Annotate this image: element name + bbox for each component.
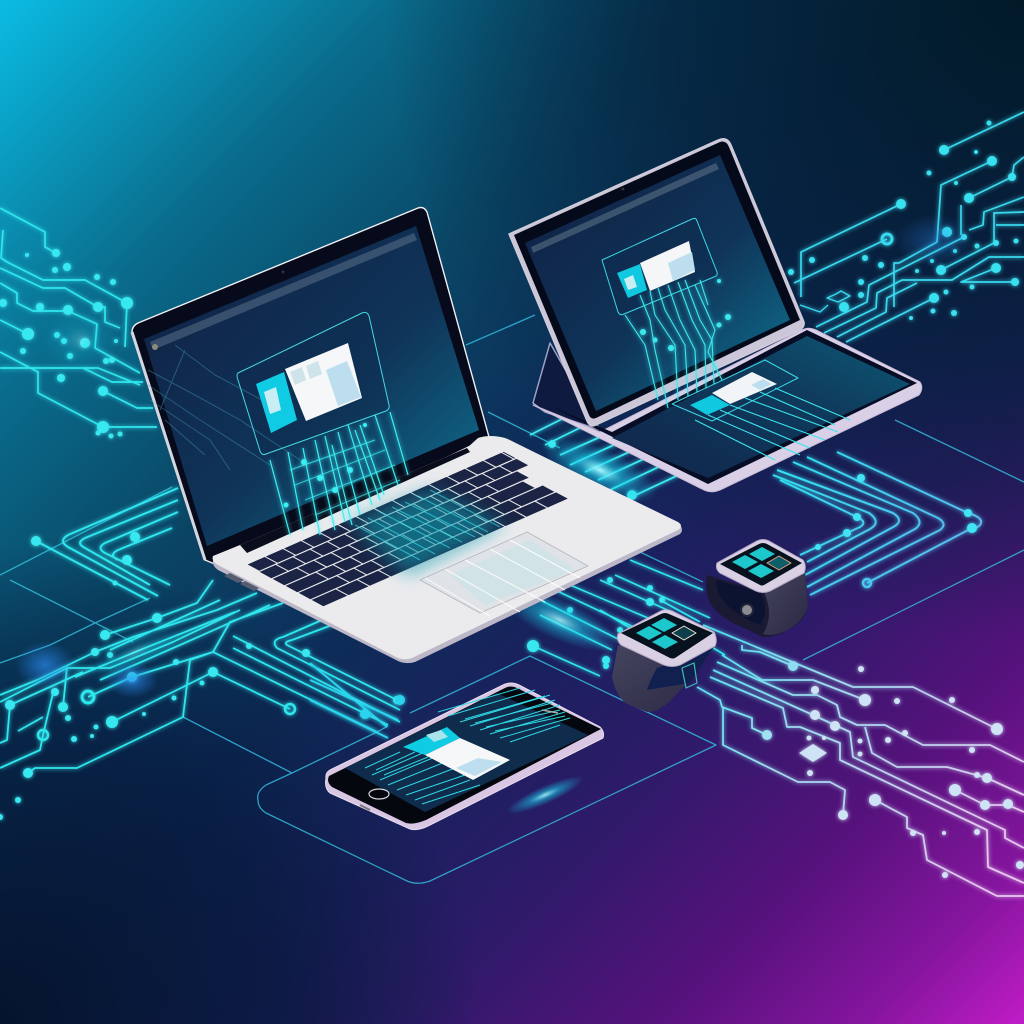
circuit: lines left of phone — [310, 663, 404, 738]
hinge strip — [240, 448, 470, 553]
keyboard traces — [355, 490, 500, 560]
watch case — [716, 540, 805, 592]
glow under phone — [503, 770, 587, 820]
phone home button — [369, 789, 389, 799]
circuit: bright bundle between laptop and tablet — [530, 405, 700, 500]
laptop screen faint traces — [148, 345, 300, 470]
circuit: mid left chevrons — [31, 488, 178, 600]
phone cards — [403, 727, 460, 755]
tablet window — [602, 218, 717, 315]
lower panel window — [672, 360, 798, 421]
phone traces — [365, 688, 570, 804]
tablet kickstand — [533, 343, 600, 430]
circuit: lower right — [697, 625, 1024, 896]
tablet circuit traces — [625, 279, 731, 408]
tablet device — [509, 139, 922, 492]
laptop touchpad — [420, 532, 588, 616]
watch display tiles — [636, 618, 696, 649]
watch case — [617, 610, 716, 666]
circuit: lower left — [0, 580, 401, 820]
upper left glow — [42, 308, 118, 372]
laptop keyboard — [252, 454, 576, 603]
laptop lid — [132, 208, 489, 567]
phone body — [326, 683, 604, 830]
circuit: under laptop and around watches — [527, 560, 725, 676]
tablet screen — [509, 139, 804, 426]
laptop device — [132, 208, 808, 830]
thin layout frame lines — [0, 315, 1024, 883]
laptop keyboard glow overlay — [352, 490, 505, 575]
watch display tiles — [732, 547, 791, 578]
tablet lower panel — [533, 328, 922, 492]
watch band — [706, 573, 808, 637]
lower left glows — [15, 614, 192, 698]
circuit: upper right — [788, 112, 1024, 342]
laptop window — [237, 312, 389, 455]
central glow between laptop and tablet — [534, 425, 666, 515]
circuit: right chevrons — [773, 452, 981, 595]
laptop base — [213, 412, 682, 663]
glow below laptop — [495, 577, 625, 663]
phone device — [326, 683, 604, 830]
circuit: upper left — [0, 208, 157, 438]
watch band — [612, 643, 717, 712]
upper right glow — [895, 214, 975, 266]
watch back — [706, 540, 808, 637]
lower panel circuit lines — [695, 388, 850, 460]
phone display — [345, 693, 588, 812]
laptop cyan traces from window — [270, 412, 408, 535]
watch front — [612, 610, 717, 712]
